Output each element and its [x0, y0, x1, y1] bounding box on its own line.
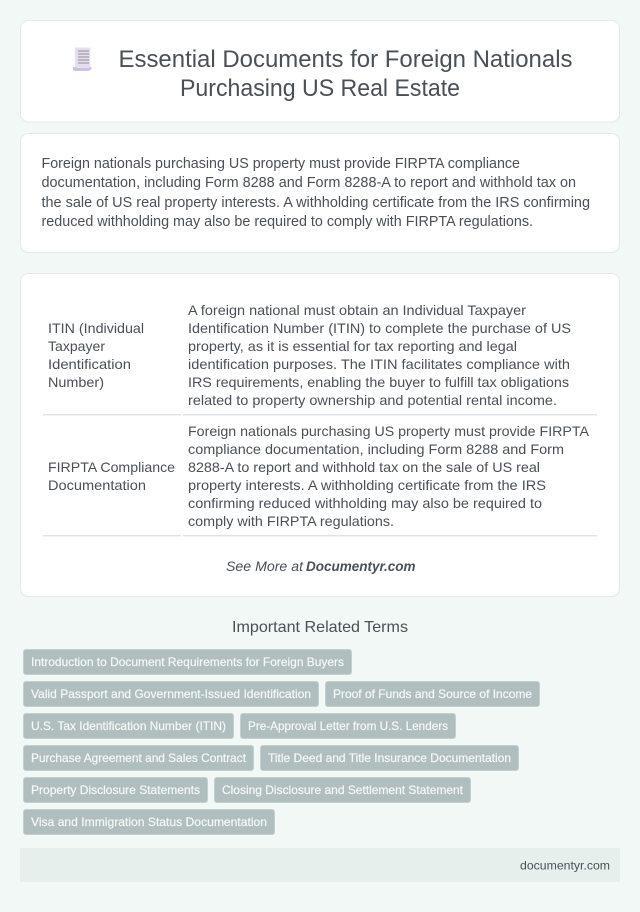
tag list: [24, 650, 540, 834]
intro paragraph: Foreign nationals purchasing US property must provide FIRPTA compliance: [42, 156, 520, 172]
title: [118, 46, 572, 102]
tag: [24, 682, 318, 706]
row text: FIRPTA: property interests. A withholding certificate from the IRS: [188, 477, 546, 493]
tag: Visa and Immigration Status Documentation: [31, 815, 267, 829]
tag: [24, 714, 234, 738]
row label: ITIN: [48, 320, 144, 390]
tag: Property Disclosure Statements: [31, 783, 200, 797]
row text: FIRPTA: comply with FIRPTA regulations.: [188, 513, 394, 529]
tag: [24, 650, 352, 674]
see more link: See More at: [226, 558, 304, 574]
tag: [214, 778, 470, 802]
tag: [260, 746, 518, 770]
row text: ITIN: Identification Number (ITIN) to complete the purchase of US: [188, 320, 571, 336]
row label: ITIN: Number): [48, 374, 104, 390]
row text: FIRPTA: [188, 423, 590, 529]
tag: Closing Disclosure and Settlement Statement: [222, 783, 464, 797]
footer bar: documentyr.com: [520, 858, 610, 872]
tag: [240, 714, 456, 738]
row label: FIRPTA: [48, 459, 175, 493]
tag: U.S. Tax Identification Number (ITIN): [31, 719, 226, 733]
row label: ITIN: ITIN (Individual: [48, 320, 144, 336]
panel: introduction: [20, 134, 620, 252]
row text: FIRPTA: compliance documentation, including Form 8288 and Form: [188, 441, 564, 457]
row text: ITIN: [188, 302, 571, 408]
intro paragraph: [42, 156, 590, 230]
row text: ITIN: identification purposes. The ITIN facilitates compliance with: [188, 356, 570, 372]
row label: ITIN: Taxpayer: [48, 338, 105, 354]
row text: FIRPTA: 8288-A to report and withhold tax on the sale of US real: [188, 459, 540, 475]
tag: Introduction to Document Requirements for Foreign Buyers: [31, 655, 344, 669]
intro paragraph: reduced withholding may also be required to comply with FIRPTA regulations.: [42, 214, 533, 230]
tag: Title Deed and Title Insurance Documentation: [268, 751, 511, 765]
tag: [24, 810, 274, 834]
tag: Proof of Funds and Source of Income: [333, 687, 532, 701]
row text: FIRPTA: confirming reduced withholding may also be required to: [188, 495, 542, 511]
row text: FIRPTA: Foreign nationals purchasing US property must provide FIRPTA: [188, 423, 590, 439]
row text: ITIN: IRS requirements, enabling the buyer to fulfill tax obligations: [188, 374, 569, 390]
row label: FIRPTA: FIRPTA Compliance: [48, 459, 175, 475]
intro paragraph: documentation, including Form 8288 and Form 8288-A to report and withhold tax on: [42, 175, 576, 191]
tag: Pre-Approval Letter from U.S. Lenders: [248, 719, 448, 733]
icon: document receipt: [73, 47, 92, 71]
row label: FIRPTA: Documentation: [48, 477, 146, 493]
panel: document table: [20, 274, 620, 596]
row text: ITIN: property, as it is essential for tax reporting and legal: [188, 338, 517, 354]
row text: ITIN: A foreign national must obtain an Individual Taxpayer: [188, 302, 526, 318]
title: Essential Documents for Foreign Nationals: [118, 46, 572, 73]
tag: [24, 746, 254, 770]
row text: ITIN: related to property ownership and potential rental income.: [188, 392, 557, 408]
title: Purchasing US Real Estate: [180, 75, 460, 102]
tag: Valid Passport and Government-Issued Identification: [31, 687, 311, 701]
tag: Purchase Agreement and Sales Contract: [31, 751, 247, 765]
tag: [24, 778, 208, 802]
intro paragraph: the sale of US real property interests. A withholding certificate from the IRS confirming: [42, 195, 590, 211]
see more link: [226, 558, 416, 574]
see more link: Documentyr.com: [306, 558, 416, 574]
heading: related terms: Important Related Terms: [232, 619, 408, 636]
row label: ITIN: Identification: [48, 356, 131, 372]
footer bar: [20, 848, 620, 882]
tag: [326, 682, 540, 706]
panel: header: [20, 20, 620, 122]
